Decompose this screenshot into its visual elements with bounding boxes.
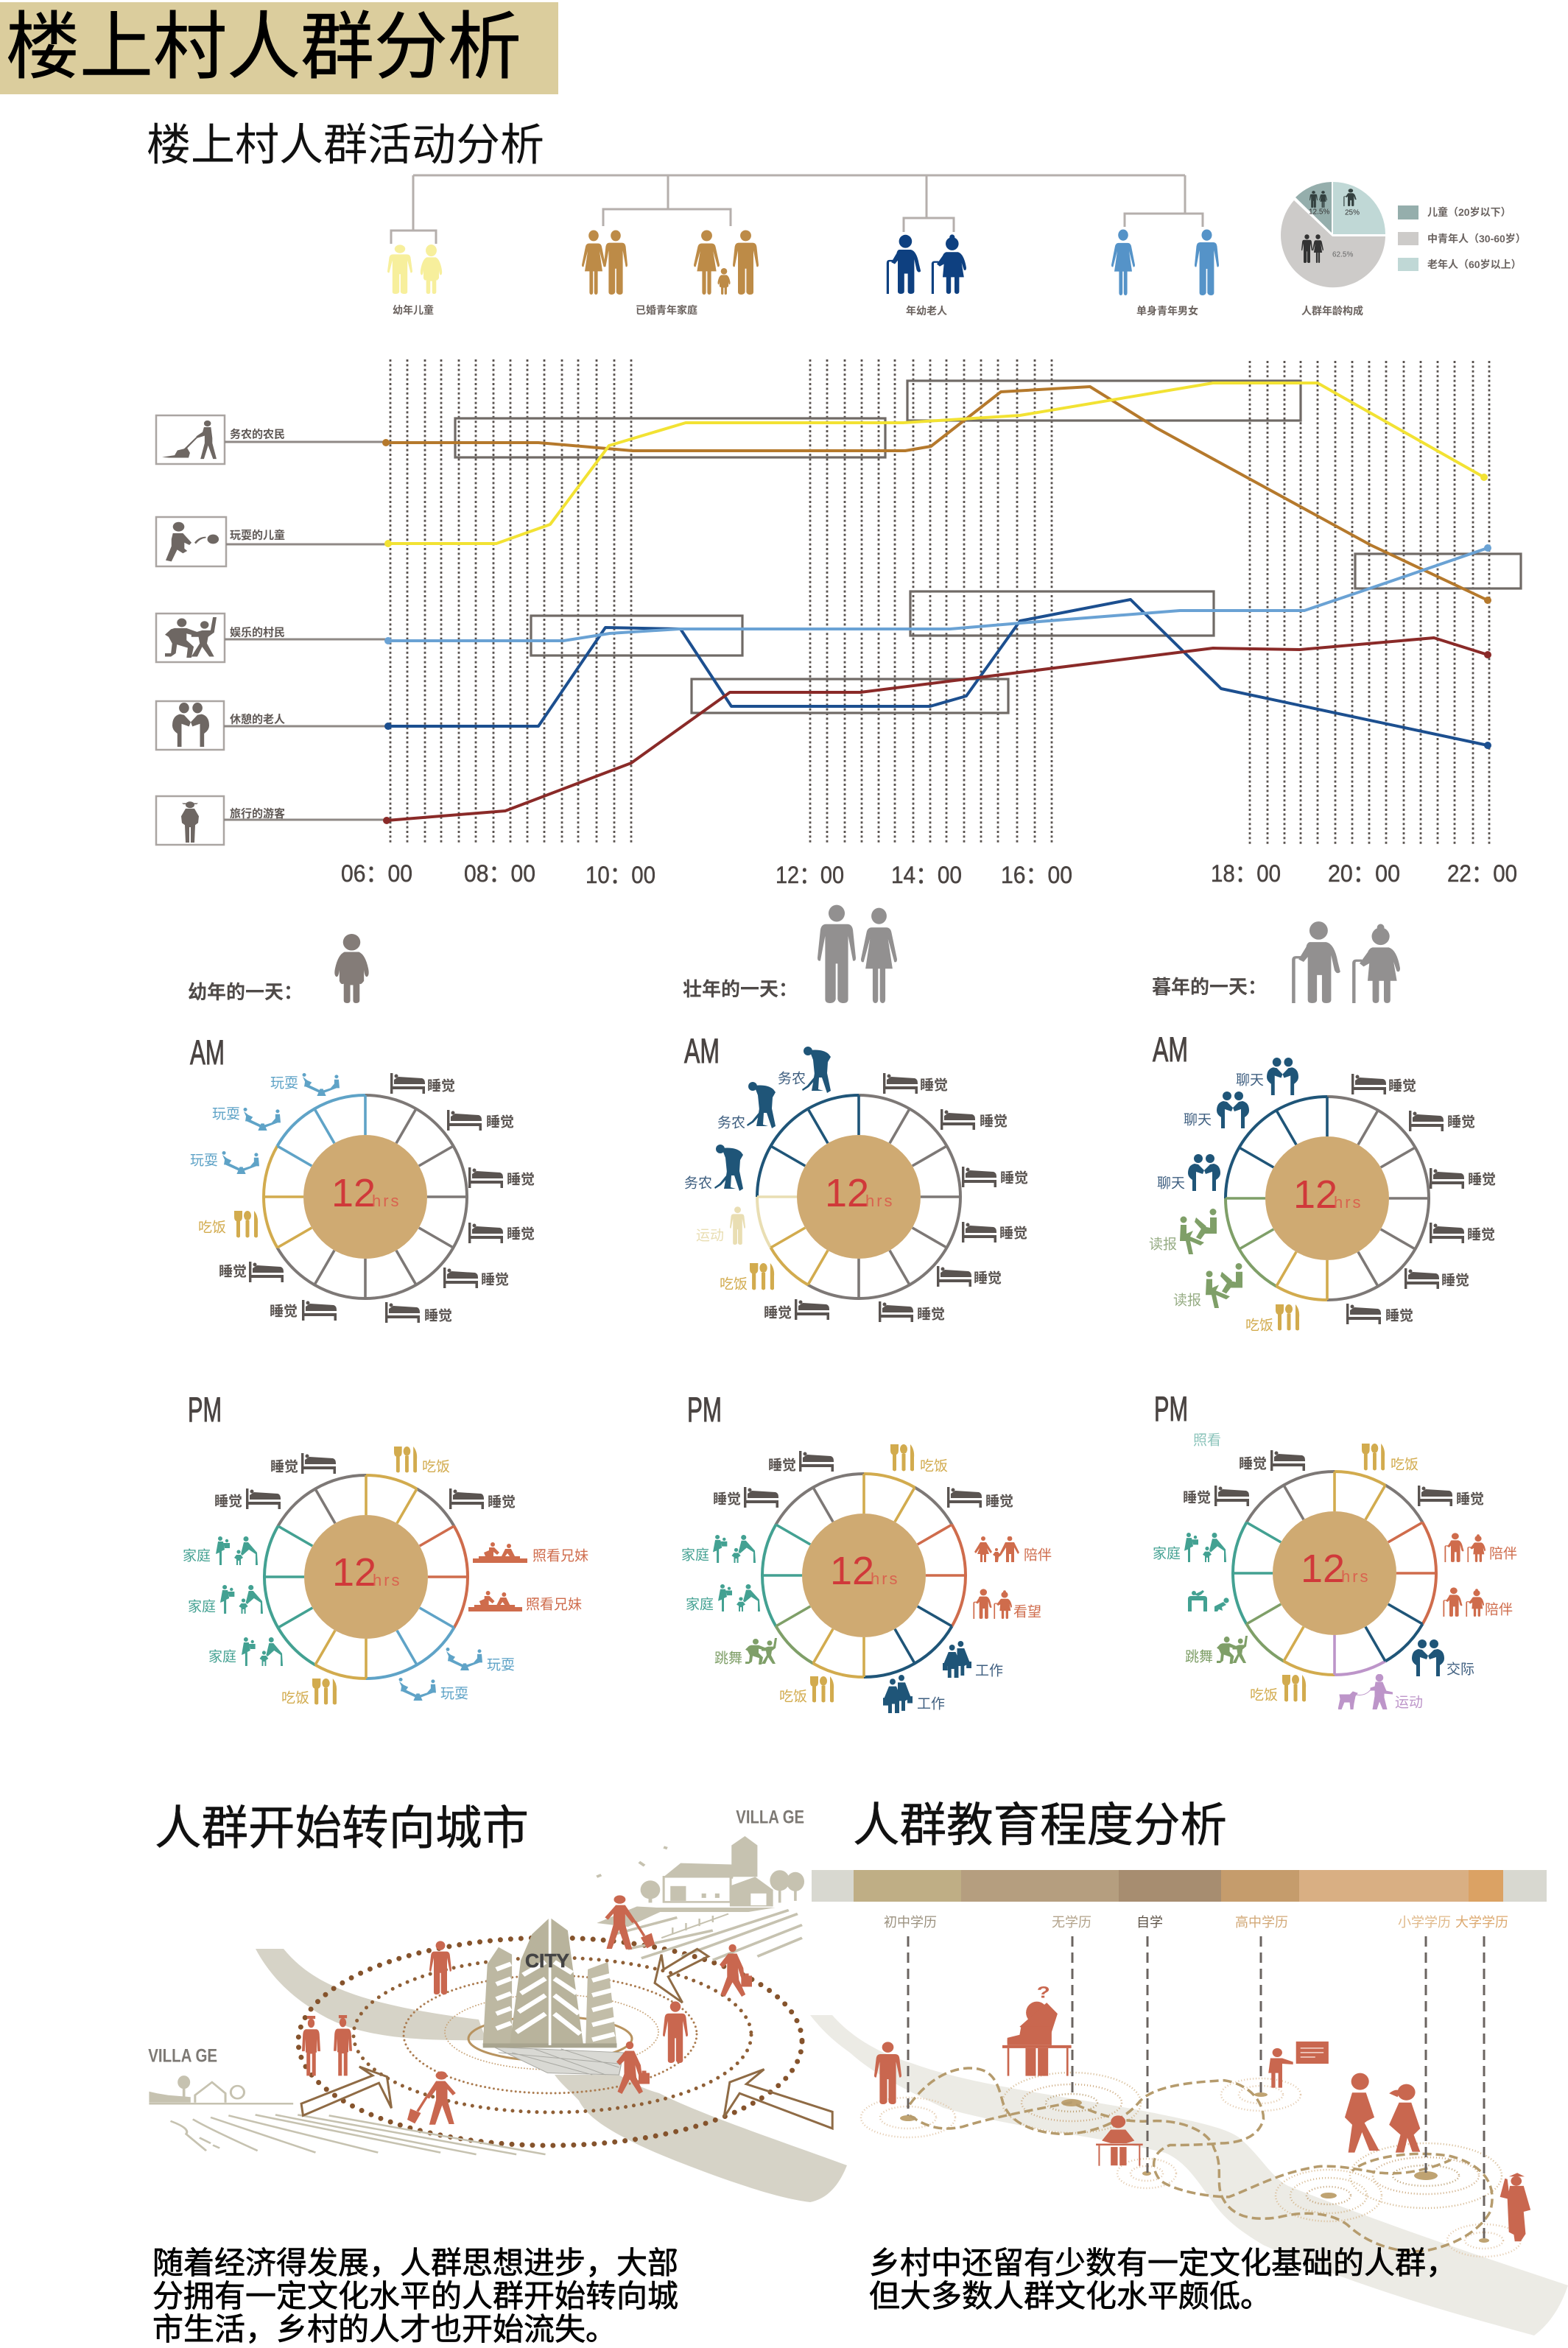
AM label: AM	[190, 1033, 225, 1072]
activity: eat	[720, 1263, 774, 1292]
activity: dance	[714, 1638, 777, 1666]
PM label: PM	[687, 1390, 722, 1429]
clock ring	[725, 1436, 1003, 1715]
row: villagers	[156, 614, 388, 662]
activities: sleep: 睡觉	[219, 1264, 247, 1280]
activities: eat	[779, 1444, 948, 1704]
activities: farm work: 务农	[717, 1115, 745, 1131]
activities: play: 玩耍	[270, 1075, 298, 1092]
group: elderly	[887, 234, 966, 317]
panel: migration illustration	[148, 1807, 847, 2202]
activities: sleep: 睡觉	[1468, 1171, 1496, 1187]
clock ring: 12	[1293, 1173, 1337, 1217]
text block: migration description: 随着经济得发展，人群思想进步，大部	[152, 2246, 678, 2280]
clock ring	[227, 1438, 505, 1716]
panel: education illustration background road	[810, 2015, 1568, 2335]
activities: sleep: 睡觉	[481, 1271, 509, 1287]
activities: sleep	[713, 1451, 1013, 1510]
line series	[382, 383, 1491, 824]
row: farmers	[156, 415, 388, 464]
activities: accompany and visit	[973, 1536, 1052, 1620]
activities: sleep: 睡觉	[1441, 1273, 1469, 1289]
wheel: elderly PM	[1153, 1389, 1517, 1712]
wheel: adult PM	[681, 1390, 1052, 1715]
activities: family: 家庭	[681, 1547, 709, 1563]
activities: eat	[281, 1447, 450, 1706]
activities: minding siblings: 照看兄妹	[526, 1597, 582, 1613]
text block: education description: 乡村中还留有少数有一定文化基础的人群，	[869, 2246, 1457, 2280]
activities: sleep: 睡觉	[917, 1307, 945, 1323]
activities: accompany: 陪伴	[1489, 1545, 1517, 1561]
time axis labels: 18：00	[1211, 860, 1281, 887]
series: children	[384, 383, 1488, 547]
row: farmers: 务农的农民	[230, 427, 285, 440]
activities: chatting: 聊天	[1236, 1072, 1264, 1089]
activities: accompany and visit: 看望	[1013, 1604, 1041, 1620]
activities: sleep: 睡觉	[486, 1114, 514, 1130]
time axis labels: 08：00	[464, 860, 535, 887]
activities: sleep	[764, 1073, 1028, 1323]
activities: sleep: 睡觉	[764, 1305, 792, 1321]
activities: sleep: 睡觉	[713, 1491, 741, 1507]
time axis labels	[341, 860, 1517, 888]
activities: sleep	[214, 1453, 516, 1510]
activities: family	[681, 1535, 760, 1613]
PM label: PM	[188, 1390, 222, 1429]
row: elderly	[156, 701, 388, 750]
figure: puzzled student at desk	[1002, 1983, 1072, 2076]
activities: eat: 吃饭	[281, 1690, 309, 1706]
clock ring: hrs	[871, 1570, 900, 1588]
panel: population tree	[387, 175, 1526, 317]
activity: socialising: 交际	[1446, 1662, 1474, 1678]
pie chart: age composition: 人群年龄构成	[1301, 305, 1363, 317]
activities: sleep: 睡觉	[980, 1114, 1008, 1130]
AM label: AM	[1153, 1030, 1188, 1069]
activity: dance: 跳舞	[1185, 1648, 1213, 1665]
time axis labels: 16：00	[1001, 862, 1072, 888]
activities: sleep: 睡觉	[1388, 1078, 1416, 1094]
activity: child care	[1188, 1432, 1229, 1611]
clock ring: hrs	[865, 1192, 895, 1210]
activities: sleep: 睡觉	[488, 1494, 516, 1510]
activities: family: 家庭	[188, 1598, 216, 1614]
activities: accompany and visit: 陪伴	[1024, 1547, 1052, 1563]
row: tourists: 旅行的游客	[230, 807, 285, 820]
activities: chatting: 聊天	[1184, 1112, 1212, 1128]
figure: graduate	[1500, 2173, 1530, 2241]
education labels	[884, 1915, 1508, 1930]
pie legend: 中青年人（30-60岁）	[1427, 233, 1526, 245]
activities: play: 玩耍	[487, 1657, 515, 1673]
dashed wandering routes	[910, 2068, 1492, 2252]
heading: education level analysis: 人群教育程度分析	[853, 1800, 1227, 1852]
series: tourists	[383, 638, 1491, 824]
activities: sleep: 睡觉	[768, 1457, 796, 1473]
clock ring: 12	[1301, 1547, 1345, 1591]
group: married young families	[582, 230, 759, 316]
time axis labels: 20：00	[1328, 860, 1400, 887]
row: children: 玩耍的儿童	[230, 529, 285, 542]
education labels: 小学学历	[1398, 1915, 1451, 1930]
activities: eat: 吃饭	[920, 1458, 948, 1474]
figure: girl walking	[1389, 2084, 1420, 2153]
time axis labels: 14：00	[891, 862, 962, 888]
row: elderly: 休憩的老人	[230, 713, 285, 726]
education labels: 自学	[1136, 1915, 1163, 1930]
activities: sleep: 睡觉	[920, 1077, 948, 1093]
figure: puzzled student at desk: ?	[1037, 1983, 1050, 2002]
activity: eat: 吃饭	[720, 1276, 748, 1292]
pie chart: age composition: 25%	[1345, 209, 1360, 217]
dotted rings and mounds	[861, 2073, 1521, 2257]
row: tourists	[156, 796, 388, 845]
heading: activity analysis: 楼上村人群活动分析	[147, 121, 544, 169]
activities: minding siblings	[468, 1542, 588, 1613]
pie legend: 儿童（20岁以下）	[1427, 206, 1511, 218]
education labels: 初中学历	[884, 1915, 937, 1930]
clock ring: hrs	[1334, 1193, 1363, 1212]
pie chart: age composition: 12.5%	[1309, 208, 1329, 217]
clock ring	[720, 1058, 998, 1336]
clock ring: hrs	[1341, 1567, 1371, 1586]
activities: reading newspaper	[1149, 1209, 1242, 1308]
activities: sleep: 睡觉	[985, 1494, 1013, 1510]
activities: sleep: 睡觉	[507, 1171, 535, 1187]
activities: work: 工作	[975, 1663, 1003, 1679]
heading: elderly day: 暮年的一天：	[1152, 976, 1267, 998]
activities: work	[883, 1641, 1003, 1713]
activities: sleep: 睡觉	[270, 1458, 298, 1474]
activity: dance	[1185, 1636, 1248, 1665]
clock ring: 12	[830, 1549, 874, 1593]
time axis labels: 12：00	[776, 862, 844, 888]
activities: sleep: 睡觉	[427, 1078, 455, 1094]
activities: sleep	[1183, 1450, 1484, 1507]
activities: sleep: 睡觉	[1239, 1455, 1267, 1472]
wheel: adult AM	[684, 1031, 1028, 1336]
group: single young adults	[1111, 229, 1219, 317]
activities: eat: 吃饭	[1391, 1457, 1418, 1473]
activities: family: 家庭	[686, 1597, 714, 1613]
activities: sleep: 睡觉	[424, 1308, 452, 1324]
text block: migration description: 市生活，乡村的人才也开始流失。	[152, 2312, 616, 2347]
series: farmers	[382, 387, 1491, 604]
wheel: elderly AM	[1149, 1030, 1496, 1338]
education level bar	[812, 1870, 1547, 1902]
figure: teacher at board	[1268, 2042, 1329, 2088]
activities: farm work: 务农	[778, 1071, 806, 1087]
group: young children	[387, 245, 442, 316]
row: children	[156, 517, 388, 566]
label: VILLA GE	[736, 1807, 804, 1827]
dashed level leaders	[908, 1936, 1484, 2241]
activities: eat: 吃饭	[1250, 1687, 1278, 1703]
activities: reading newspaper: 读报	[1149, 1236, 1177, 1252]
series: villagers	[384, 544, 1491, 644]
highlight boxes	[455, 381, 1521, 713]
education labels: 大学学历	[1455, 1915, 1508, 1930]
wheel: childhood PM	[183, 1390, 588, 1716]
pie chart: age composition	[1281, 182, 1385, 317]
clock ring: hrs	[373, 1571, 402, 1589]
activities: chatting	[1157, 1058, 1298, 1192]
activity: eat	[198, 1211, 258, 1237]
activities: sleep: 睡觉	[974, 1270, 1002, 1286]
text block: migration description: 分拥有一定文化水平的人群开始转向城	[152, 2279, 678, 2313]
activities: eat: 吃饭	[422, 1458, 450, 1474]
activities: play	[190, 1073, 340, 1174]
activities: sleep	[1346, 1074, 1496, 1324]
activity: child care: 照看	[1193, 1432, 1221, 1448]
time axis labels: 10：00	[586, 862, 655, 888]
activity: exercise with dog: 运动	[1395, 1694, 1423, 1710]
activities: accompany: 陪伴	[1485, 1601, 1513, 1617]
figures	[874, 1983, 1530, 2241]
city towers	[483, 1918, 624, 2075]
activity: family: 家庭	[1153, 1545, 1181, 1561]
pie legend: 老年人（60岁以上）	[1427, 259, 1522, 270]
CITY label: CITY	[525, 1950, 569, 1972]
activity: dance: 跳舞	[714, 1650, 742, 1666]
heading: childhood day	[188, 934, 369, 1003]
activities: sleep: 睡觉	[214, 1494, 242, 1510]
activities: sleep: 睡觉	[1385, 1308, 1413, 1324]
activities: farm work: 务农	[684, 1175, 712, 1192]
activities: sleep: 睡觉	[270, 1304, 298, 1320]
activity: exercise: 运动	[696, 1227, 724, 1243]
education labels: 高中学历	[1235, 1915, 1288, 1930]
PM label: PM	[1154, 1389, 1188, 1428]
clock ring	[1188, 1059, 1466, 1338]
panel: daily activity line chart	[156, 359, 1521, 888]
activities: family	[183, 1536, 283, 1666]
group: married young families: 已婚青年家庭	[636, 304, 697, 316]
row: villagers: 娱乐的村民	[230, 626, 285, 639]
activity: socialising	[1412, 1639, 1474, 1678]
activities: sleep: 睡觉	[1183, 1489, 1211, 1505]
activity: exercise with dog	[1338, 1674, 1423, 1710]
activity: eat: 吃饭	[198, 1220, 226, 1236]
group: elderly: 年幼老人	[906, 305, 947, 317]
activities: eat: 吃饭	[779, 1688, 807, 1704]
clock ring	[226, 1058, 504, 1336]
activities: eat	[1250, 1444, 1418, 1703]
clock ring: 12	[825, 1171, 869, 1215]
activities: accompany	[1443, 1533, 1517, 1617]
activities: work: 工作	[917, 1695, 945, 1712]
pie legend	[1398, 205, 1526, 271]
upper village farm	[597, 1807, 804, 1960]
activity: exercise	[696, 1206, 745, 1245]
title: 楼上村人群分析	[6, 6, 521, 88]
heading: adult day	[683, 905, 897, 1003]
lower village	[148, 2045, 546, 2154]
activities: sleep: 睡觉	[999, 1226, 1027, 1242]
pie chart: age composition: 62.5%	[1332, 250, 1353, 259]
time axis labels: 06：00	[341, 860, 412, 887]
travellers	[302, 1895, 752, 2125]
label: VILLA GE	[148, 2045, 217, 2066]
activities: minding siblings: 照看兄妹	[532, 1548, 588, 1564]
activities: play: 玩耍	[440, 1687, 468, 1701]
clock ring	[1195, 1434, 1474, 1712]
heading: childhood day: 幼年的一天：	[188, 981, 303, 1003]
activities: sleep: 睡觉	[507, 1226, 535, 1242]
clock ring: 12	[332, 1550, 376, 1595]
clock ring: 12	[331, 1171, 376, 1215]
activities: sleep: 睡觉	[1447, 1114, 1475, 1130]
dotted hour grid	[390, 359, 1489, 846]
activity: eat: 吃饭	[1245, 1317, 1273, 1333]
group: single young adults: 单身青年男女	[1136, 305, 1198, 317]
road	[256, 1949, 847, 2202]
heading: adult day: 壮年的一天：	[683, 978, 798, 1000]
wheel: childhood AM	[190, 1033, 535, 1336]
heading: migration to city: 人群开始转向城市	[155, 1803, 529, 1855]
migration arrows	[301, 1949, 832, 2129]
activities: farm work	[684, 1047, 831, 1192]
activities: sleep: 睡觉	[1467, 1227, 1495, 1243]
activities: play: 玩耍	[190, 1153, 218, 1168]
AM label: AM	[684, 1031, 720, 1070]
activities: reading newspaper: 读报	[1173, 1292, 1201, 1308]
heading: elderly day	[1152, 921, 1400, 1003]
activity: eat	[1245, 1304, 1299, 1333]
series: elderly	[384, 600, 1491, 749]
activities: chatting: 聊天	[1157, 1175, 1185, 1192]
group: young children: 幼年儿童	[393, 304, 434, 316]
education map	[861, 1936, 1530, 2257]
activities: sleep: 睡觉	[1456, 1491, 1484, 1507]
figure: reader at desk	[1096, 2115, 1143, 2166]
activities: play: 玩耍	[212, 1106, 240, 1122]
text block: education description: 但大多数人群文化水平颇低。	[869, 2279, 1271, 2313]
activity: family	[1153, 1533, 1226, 1562]
clock ring: hrs	[372, 1192, 401, 1210]
time axis labels: 22：00	[1447, 860, 1517, 887]
figure: boy walking	[1345, 2073, 1379, 2153]
tree connectors	[391, 175, 1203, 244]
education labels: 无学历	[1052, 1915, 1091, 1930]
activities: sleep	[219, 1073, 535, 1324]
activities: sleep: 睡觉	[1000, 1170, 1028, 1186]
dotted ripple rings	[298, 1938, 802, 2145]
activities: play	[399, 1648, 515, 1701]
activities: family: 家庭	[208, 1648, 236, 1665]
activities: family: 家庭	[183, 1548, 211, 1564]
